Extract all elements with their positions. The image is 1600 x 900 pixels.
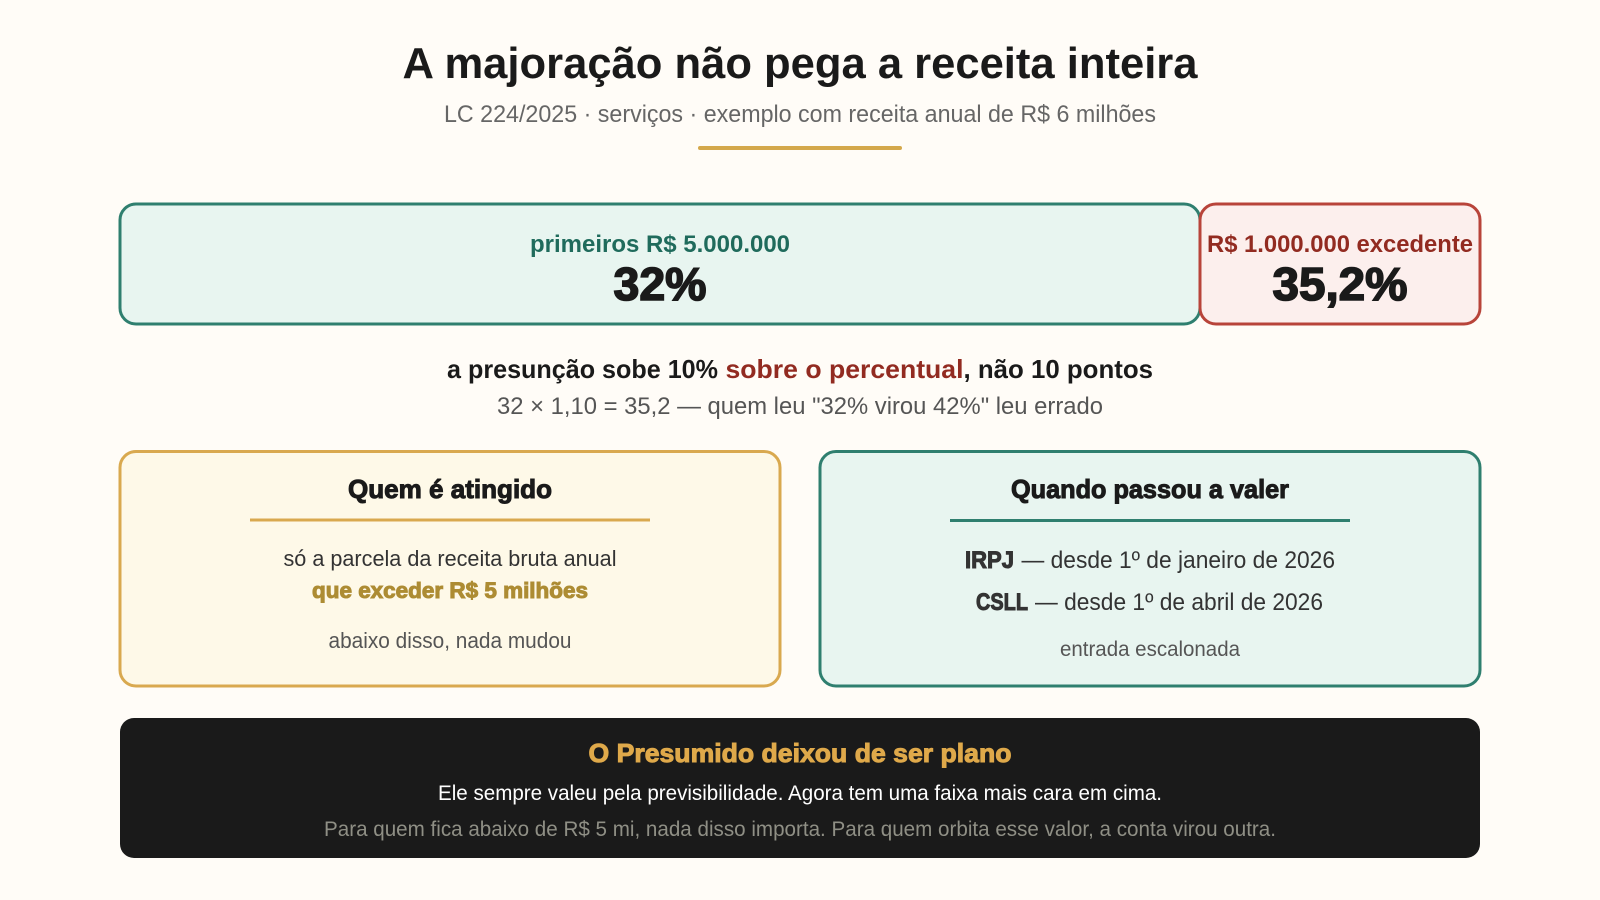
excess value: 35,2% <box>1272 258 1408 310</box>
title: A majoração não pega a receita inteira <box>402 39 1198 88</box>
panel: first bracket 32% <box>120 204 1200 324</box>
conclusion line: Ele sempre valeu pela previsibilidade. Agora tem uma faixa mais cara em cima. <box>438 782 1162 805</box>
explanation calculation: 32 × 1,10 = 35,2 — quem leu "32% virou 42%" leu errado <box>497 393 1103 420</box>
IRPJ date: — desde 1º de janeiro de 2026 <box>1022 547 1335 574</box>
explanation headline: sobre o percentual <box>726 354 964 384</box>
gold divider <box>698 146 902 150</box>
IRPJ date: IRPJ <box>965 547 1014 574</box>
subtitle: LC 224/2025 · serviços · exemplo com receita anual de R$ 6 milhões <box>444 101 1156 128</box>
explanation headline: , não 10 pontos <box>964 354 1153 384</box>
card note: abaixo disso, nada mudou <box>328 628 572 653</box>
CSLL date: CSLL <box>976 589 1028 616</box>
card note: entrada escalonada <box>1060 638 1240 661</box>
panel: quem é atingido <box>120 452 780 686</box>
card heading: Quem é atingido <box>348 474 552 504</box>
panel: quando passou a valer <box>820 452 1480 686</box>
panel: conclusion <box>120 718 1480 858</box>
card body: só a parcela da receita bruta anual <box>284 546 616 571</box>
conclusion heading: O Presumido deixou de ser plano <box>588 738 1012 768</box>
conclusion note: Para quem fica abaixo de R$ 5 mi, nada disso importa. Para quem orbita esse valor, a conta virou outra. <box>324 818 1276 841</box>
header <box>402 39 1198 150</box>
CSLL date: — desde 1º de abril de 2026 <box>1035 589 1323 616</box>
explanation text <box>447 354 1153 420</box>
card highlight: que exceder R$ 5 milhões <box>312 578 588 603</box>
explanation headline <box>447 354 1153 384</box>
explanation headline: a presunção sobe 10% <box>447 354 718 384</box>
excess label: R$ 1.000.000 excedente <box>1207 231 1473 258</box>
card heading: Quando passou a valer <box>1011 474 1289 504</box>
bracket label: primeiros R$ 5.000.000 <box>530 231 790 258</box>
panel: excess bracket 35,2% <box>1200 204 1480 324</box>
bracket value: 32% <box>614 258 706 310</box>
